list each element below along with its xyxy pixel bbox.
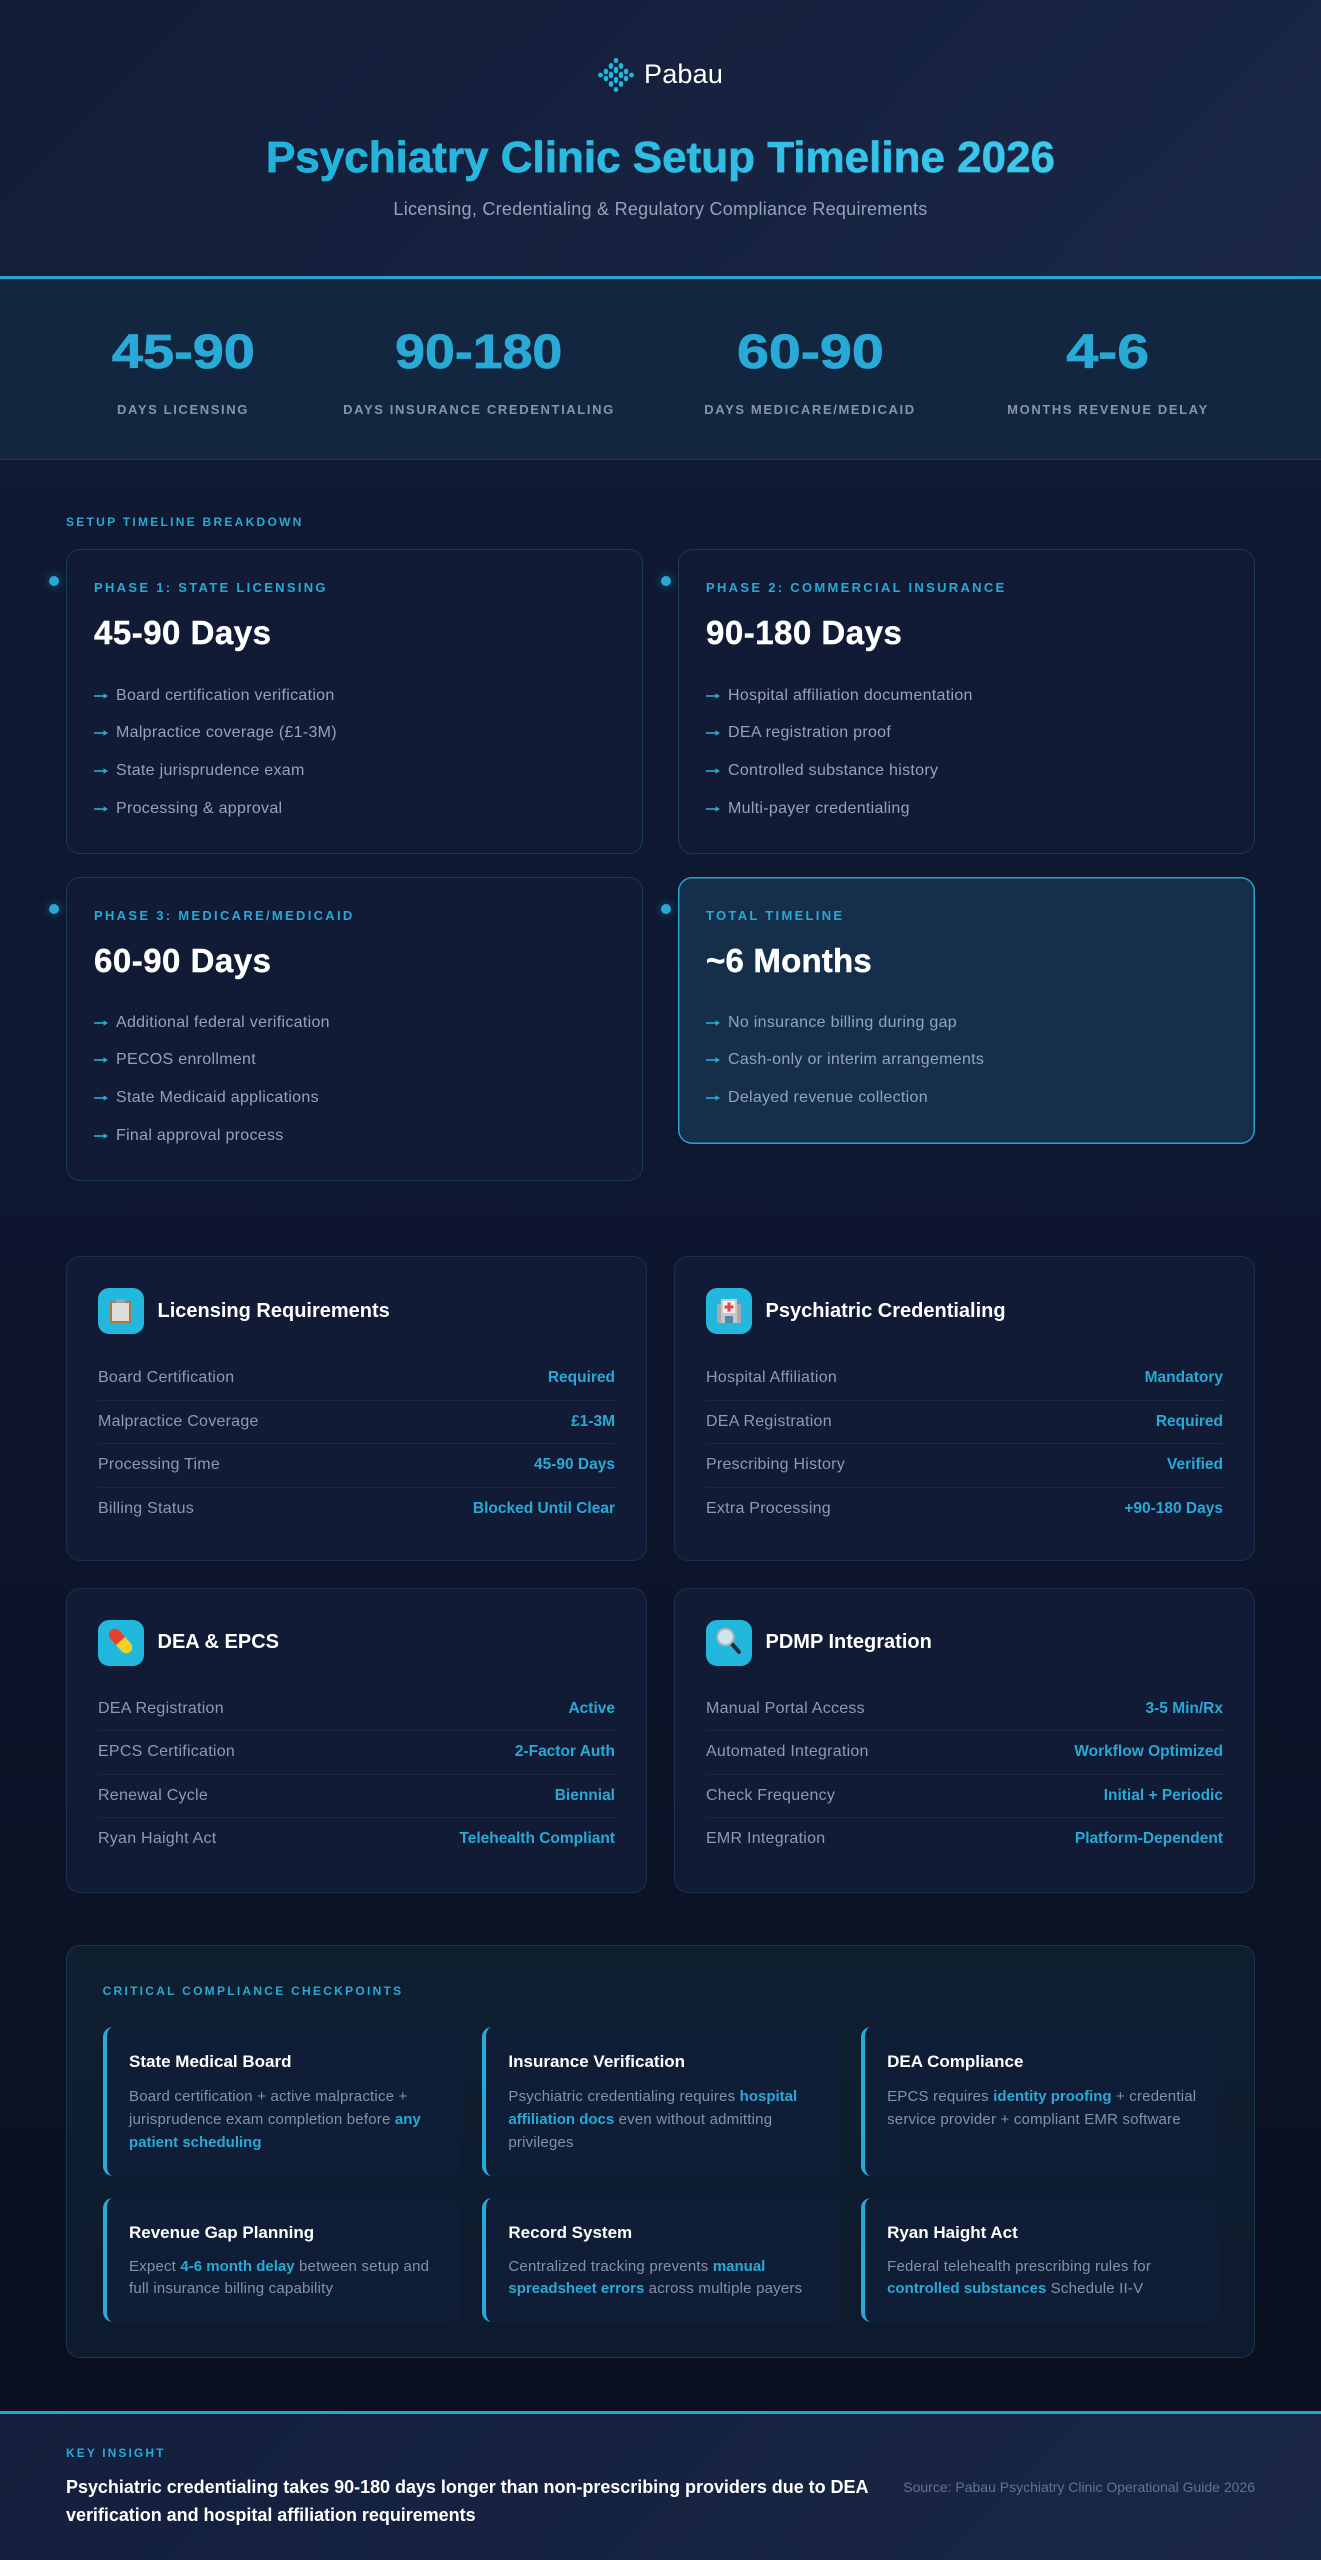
panel: phase 1 state licensing: Board certification verification <box>116 687 335 704</box>
list item <box>706 762 938 779</box>
row: EPCS certification: EPCS Certification <box>98 1743 235 1760</box>
checkpoint: revenue gap planning: full insurance billing capability <box>129 2280 333 2296</box>
row: check frequency: Check Frequency <box>706 1787 835 1804</box>
icon: magnifier <box>706 1620 752 1666</box>
row: malpractice coverage <box>98 1413 615 1430</box>
card title: PDMP Integration <box>766 1631 932 1653</box>
timeline dot <box>49 904 59 914</box>
checkpoint: revenue gap planning: Expect 4-6 month delay between setup and <box>129 2258 429 2274</box>
panel: phase 2 commercial insurance: DEA registration proof <box>728 724 891 741</box>
phase duration: 60-90 Days <box>94 942 271 979</box>
stat: days medicare/medicaid: DAYS MEDICARE/MEDICAID <box>704 402 916 417</box>
stat: days licensing: 45-90 <box>111 326 255 379</box>
checkpoint: insurance verification: Psychiatric credentialing requires hospital <box>508 2088 797 2104</box>
row: automated integration: Workflow Optimized <box>1074 1743 1223 1760</box>
row: hospital affiliation <box>706 1369 1223 1386</box>
panel: DEA and EPCS <box>66 1588 647 1893</box>
row: automated integration: Automated Integration <box>706 1743 869 1760</box>
panel: phase 2 commercial insurance: Controlled substance history <box>728 762 938 779</box>
timeline dot <box>661 904 671 914</box>
row: hospital affiliation: Hospital Affiliation <box>706 1369 837 1386</box>
panel: phase 3 medicare/medicaid: Additional federal verification <box>116 1014 330 1031</box>
checkpoint: record system: spreadsheet errors across multiple payers <box>508 2280 802 2296</box>
row: EMR integration <box>706 1830 1223 1847</box>
panel: PDMP integration <box>674 1588 1255 1893</box>
checkpoint: state medical board: State Medical Board <box>129 2052 291 2071</box>
stat: days insurance credentialing: DAYS INSURANCE CREDENTIALING <box>343 402 615 417</box>
checkpoint: state medical board: jurisprudence exam completion before any <box>129 2110 421 2128</box>
card title: DEA & EPCS <box>158 1631 279 1653</box>
panel: phase 1 state licensing: Malpractice coverage (£1-3M) <box>116 724 337 741</box>
row: manual portal access: 3-5 Min/Rx <box>1145 1700 1223 1717</box>
header <box>0 0 1321 279</box>
list item <box>94 1051 256 1068</box>
icon: clipboard <box>98 1288 144 1334</box>
checkpoint: state medical board: patient scheduling <box>129 2134 262 2150</box>
checkpoint: Ryan Haight Act: Federal telehealth prescribing rules for <box>887 2258 1151 2274</box>
stat: days insurance credentialing: 90-180 <box>395 326 563 379</box>
row: billing status <box>98 1500 615 1517</box>
list item <box>706 724 891 741</box>
stat: days medicare/medicaid: 60-90 <box>737 326 883 379</box>
logo wordmark: Pabau <box>644 59 723 89</box>
row: renewal cycle: Biennial <box>555 1787 615 1804</box>
checkpoint: Ryan Haight Act: controlled substances Schedule II-V <box>887 2280 1143 2296</box>
stat: days insurance credentialing <box>343 326 615 417</box>
phase duration: 90-180 Days <box>706 614 902 651</box>
row: board certification <box>98 1369 615 1386</box>
row: board certification: Board Certification <box>98 1369 234 1386</box>
checkpoint: DEA compliance <box>861 2027 1218 2176</box>
checkpoint: record system: Centralized tracking prevents manual <box>508 2258 765 2274</box>
row: hospital affiliation: Mandatory <box>1145 1369 1223 1386</box>
checkpoint: Ryan Haight Act: Ryan Haight Act <box>887 2223 1018 2242</box>
logo: Pabau <box>598 58 723 92</box>
stat: months revenue delay <box>1007 326 1209 417</box>
list item <box>706 1051 984 1068</box>
stats bar <box>0 279 1321 460</box>
checkpoint: insurance verification: privileges <box>508 2134 574 2150</box>
checkpoint: state medical board <box>103 2027 460 2176</box>
key insight text: verification and hospital affiliation requirements <box>66 2505 476 2525</box>
phase label: PHASE 1: STATE LICENSING <box>94 580 328 595</box>
row: EMR integration: Platform-Dependent <box>1075 1830 1223 1847</box>
source note: Source: Pabau Psychiatry Clinic Operational Guide 2026 <box>903 2479 1255 2495</box>
row: processing time: Processing Time <box>98 1456 220 1473</box>
list item <box>94 1089 319 1106</box>
checkpoint: record system <box>482 2198 840 2322</box>
key insight text <box>66 2477 868 2525</box>
icon: Pabau diamond mark <box>598 58 634 92</box>
row: DEA registration <box>706 1413 1223 1430</box>
checkpoint: insurance verification: Insurance Verification <box>508 2052 685 2071</box>
phase duration: 45-90 Days <box>94 614 271 651</box>
icon: pill <box>98 1620 144 1666</box>
row: processing time <box>98 1456 615 1473</box>
row: malpractice coverage: Malpractice Coverage <box>98 1413 259 1430</box>
timeline dot <box>49 576 59 586</box>
row: DEA registration: Active <box>568 1700 615 1717</box>
row: Ryan Haight Act: Ryan Haight Act <box>98 1830 216 1847</box>
row: malpractice coverage: £1-3M <box>571 1413 615 1430</box>
checkpoint: insurance verification: affiliation docs even without admitting <box>508 2110 772 2128</box>
section heading: setup timeline breakdown: SETUP TIMELINE BREAKDOWN <box>66 515 304 529</box>
panel: phase 1 state licensing <box>66 549 642 854</box>
stat: months revenue delay: MONTHS REVENUE DELAY <box>1007 402 1209 417</box>
checkpoint: revenue gap planning: Revenue Gap Planning <box>129 2223 314 2242</box>
row: billing status: Billing Status <box>98 1500 194 1517</box>
list item <box>94 1127 284 1144</box>
row: processing time: 45-90 Days <box>534 1456 615 1473</box>
row: DEA registration: DEA Registration <box>98 1700 224 1717</box>
footer <box>0 2411 1321 2560</box>
panel: total timeline: Cash-only or interim arrangements <box>728 1051 984 1068</box>
row: check frequency: Initial + Periodic <box>1104 1787 1223 1804</box>
row: EPCS certification: 2-Factor Auth <box>515 1743 615 1760</box>
key insight label: KEY INSIGHT <box>66 2446 166 2460</box>
panel: phase 1 state licensing: State jurisprudence exam <box>116 762 305 779</box>
row: extra processing: +90-180 Days <box>1124 1500 1223 1517</box>
panel: phase 2 commercial insurance <box>678 549 1255 854</box>
panel: total timeline: Delayed revenue collection <box>728 1089 928 1106</box>
list item <box>94 1014 330 1031</box>
checkpoint: DEA compliance: DEA Compliance <box>887 2052 1023 2071</box>
row: board certification: Required <box>548 1369 615 1386</box>
card title: Psychiatric Credentialing <box>766 1300 1006 1322</box>
card title: Licensing Requirements <box>158 1300 390 1322</box>
row: EPCS certification <box>98 1743 615 1760</box>
row: prescribing history: Prescribing History <box>706 1456 845 1473</box>
list item <box>94 800 282 817</box>
key insight text: Psychiatric credentialing takes 90-180 days longer than non-prescribing providers due to DEA <box>66 2477 868 2497</box>
row: billing status: Blocked Until Clear <box>473 1500 615 1517</box>
row: DEA registration: DEA Registration <box>706 1413 832 1430</box>
row: manual portal access <box>706 1700 1223 1717</box>
stat: days medicare/medicaid <box>704 326 916 417</box>
list item <box>706 1089 928 1106</box>
icon: hospital <box>706 1288 752 1334</box>
phase label: PHASE 2: COMMERCIAL INSURANCE <box>706 580 1006 595</box>
panel: licensing requirements <box>66 1256 647 1561</box>
checkpoint: state medical board: Board certification + active malpractice + <box>129 2088 408 2104</box>
phase label: PHASE 3: MEDICARE/MEDICAID <box>94 908 355 923</box>
list item <box>706 687 973 704</box>
row: renewal cycle: Renewal Cycle <box>98 1787 208 1804</box>
panel: phase 2 commercial insurance: Hospital affiliation documentation <box>728 687 973 704</box>
stat: days licensing <box>111 326 255 417</box>
section heading: CRITICAL COMPLIANCE CHECKPOINTS <box>103 1984 403 1998</box>
row: prescribing history <box>706 1456 1223 1473</box>
row: prescribing history: Verified <box>1167 1456 1223 1473</box>
timeline dot <box>661 576 671 586</box>
list item <box>94 724 337 741</box>
panel: psychiatric credentialing <box>674 1256 1255 1561</box>
title: Psychiatry Clinic Setup Timeline 2026 <box>266 133 1055 182</box>
row: manual portal access: Manual Portal Access <box>706 1700 865 1717</box>
checkpoint: DEA compliance: service provider + compliant EMR software <box>887 2110 1181 2128</box>
row: extra processing: Extra Processing <box>706 1500 831 1517</box>
panel: phase 2 commercial insurance: Multi-payer credentialing <box>728 800 910 817</box>
panel: phase 3 medicare/medicaid <box>66 877 642 1181</box>
row: DEA registration <box>98 1700 615 1717</box>
checkpoint: Ryan Haight Act <box>861 2198 1218 2322</box>
stat: months revenue delay: 4-6 <box>1067 326 1149 379</box>
panel: phase 3 medicare/medicaid: PECOS enrollment <box>116 1051 256 1068</box>
row: Ryan Haight Act: Telehealth Compliant <box>459 1830 615 1847</box>
row: EMR integration: EMR Integration <box>706 1830 825 1847</box>
row: Ryan Haight Act <box>98 1830 615 1847</box>
list item <box>706 1014 957 1031</box>
row: extra processing <box>706 1500 1223 1517</box>
row: automated integration <box>706 1743 1223 1760</box>
row: DEA registration: Required <box>1156 1413 1223 1430</box>
panel: phase 1 state licensing: Processing & approval <box>116 800 282 817</box>
subtitle: Licensing, Credentialing & Regulatory Compliance Requirements <box>393 199 928 219</box>
stat: days licensing: DAYS LICENSING <box>117 402 249 417</box>
panel: total timeline: No insurance billing during gap <box>728 1014 957 1031</box>
list item <box>706 800 910 817</box>
row: renewal cycle <box>98 1787 615 1804</box>
list item <box>94 687 335 704</box>
list item <box>94 762 305 779</box>
phase duration: ~6 Months <box>706 942 872 979</box>
checkpoint: record system: Record System <box>508 2223 632 2242</box>
panel: phase 3 medicare/medicaid: Final approval process <box>116 1127 284 1144</box>
panel: critical compliance checkpoints <box>66 1945 1255 2358</box>
checkpoint: revenue gap planning <box>103 2198 460 2322</box>
phase label: TOTAL TIMELINE <box>706 908 844 923</box>
panel: total timeline <box>678 877 1255 1144</box>
panel: phase 3 medicare/medicaid: State Medicaid applications <box>116 1089 319 1106</box>
checkpoint: insurance verification <box>482 2027 840 2176</box>
checkpoint: DEA compliance: EPCS requires identity proofing + credential <box>887 2088 1196 2104</box>
row: check frequency <box>706 1787 1223 1804</box>
